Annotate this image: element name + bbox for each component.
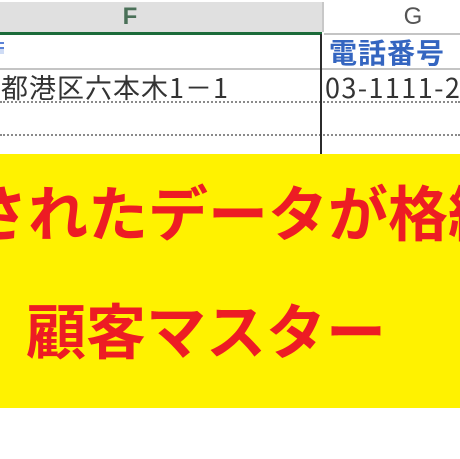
dotted row lines [0,101,460,103]
column F header [0,2,324,32]
cell: phone heading: 電話番号 [329,32,445,72]
selected column green border [0,32,322,35]
banner line 2: 顧客マスター [26,285,386,372]
spreadsheet header row [0,2,422,32]
column divider [320,34,322,154]
cell fragment: clipped blue heading [0,42,4,54]
column letter G: G [404,3,422,30]
yellow banner [0,154,460,408]
row separator lines [0,68,460,70]
column letter F: F [123,3,137,30]
cell: address: 都港区六本木1－1 [1,67,229,106]
